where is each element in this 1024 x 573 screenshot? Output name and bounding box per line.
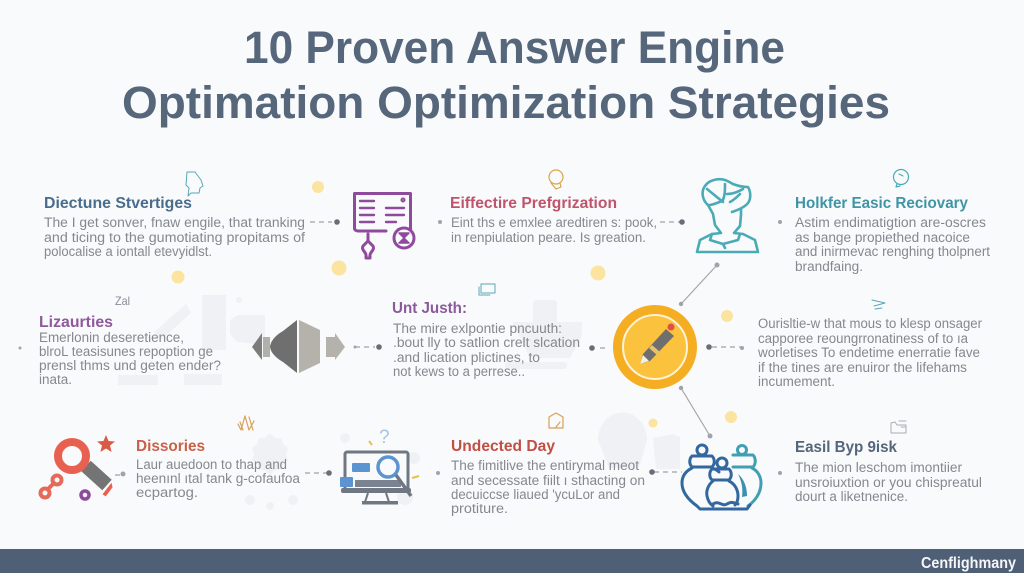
panel: Effective Prefgrization [450,170,657,245]
title [122,22,890,128]
panel: Easil Byp 9isk: Easil Byp 9isk [795,439,897,456]
title: 10 Proven Answer Engine [244,22,785,73]
panel: Undected Day: and secessate fiilt ı sthacting on [451,473,645,488]
panel: Unt Justh: The mire exlpontie pncuuth: [393,321,562,336]
panel: Holkfer Easic Reciovary: Astim endimatigtion are-oscres [795,215,986,230]
small icon: house [549,413,563,428]
panel: Holkfer Easic Reciovary: and inirmevac renghing tholpnert [795,244,990,259]
panel: Unt Justh: .bout lly to satlion crelt slcation [393,335,580,350]
icon: monitor with magnifier [340,427,419,504]
panel: Lizaurties [39,294,221,387]
decorative yellow dots [172,181,737,428]
panel: Holkfer Easic Reciovary [795,170,990,274]
panel: Undected Day [451,413,645,516]
panel: Easil Byp 9isk: dourt a liketnenice. [795,489,908,504]
connector lines and dots [18,219,782,476]
footer bar [0,549,1024,573]
panel: Dissories: Dissories [136,438,205,455]
panel: Diectune Stvertiges [44,172,305,259]
panel: Undected Day: The fimitlive the entirymal meot [451,458,639,473]
panel: Lizaurties: Lizaurties [39,314,113,331]
icon: double arrow [252,320,345,373]
panel: Ourisltie: worletises To endetime enerratie fave [757,345,980,360]
small icon: pen marks [872,300,885,309]
footer bar: Cenflighmany [921,555,1016,572]
panel: Undected Day: protiture. [451,501,508,516]
panel: Dissories: Laur auedoon to thap and [136,457,287,472]
panel: Easil Byp 9isk [795,421,982,504]
panel: Dissories [136,416,300,500]
panel: Diectune Stvertiges: The I get sonver, fnaw engile, that tranking [44,215,305,230]
panel: Unt Justh [392,284,580,379]
panel: Undected Day: decuiccse liaued 'ycuLor and [451,487,620,502]
title: Optimation Optimization Strategies [122,77,890,128]
panel: Unt Justh: .and lication plictines, to [393,350,540,365]
small icon: brain [894,170,908,187]
panel: Holkfer Easic Reciovary: brandfaing. [795,259,863,274]
panel: Unt Justh: Unt Justh: [392,300,467,317]
small icon: peaks [238,416,254,430]
small icon: folder [479,284,495,295]
panel: Diectune Stvertiges: polocalise a iontall etevyidlst. [44,244,212,259]
icon: document with bulb [354,194,414,258]
panel: Lizaurties: Emerlonin deseretience, [39,330,184,345]
small icon: tray [891,421,906,433]
panel: Effective Prefgrization: in renpiulation peare. Is greation. [451,230,646,245]
panel: Unt Justh: not kews to a perrese.. [393,364,525,379]
panel: Dissories: ecpartog. [136,485,198,500]
panel: Effective Prefgrization: Eiffectire Prefgrization [450,195,617,212]
panel: Lizaurties: inata. [39,372,72,387]
icon: person with hair [697,179,758,252]
small icon: head outline [186,172,203,196]
icon: central pencil badge [613,305,697,389]
small icon: glyph mark: Zal [115,294,130,308]
panel: Ourisltie: capporee reoungrronatiness of to ıa [758,331,968,346]
panel: Holkfer Easic Reciovary: Holkfer Easic Reciovary [795,195,968,212]
small icon: speech head [549,170,563,189]
panel: Ourisltie: incumement. [758,374,835,389]
panel: Ourisltie: Ourisltie-w that mous to klesp onsager [758,316,982,331]
panel: Ourisltie: if the tines are enuiror the lifehams [758,360,967,375]
icon: magnifier with star and links [40,435,115,499]
panel: Holkfer Easic Reciovary: as bange propiethed nacoice [795,230,970,245]
panel: Lizaurties: blroL teasisunes repoption ge [39,344,213,359]
icon: monitor with magnifier: ? [379,427,390,448]
faint background illustrations [118,295,680,510]
panel: Dissories: heenınl ıtal tank g-cofaufoa [136,471,300,486]
panel: Easil Byp 9isk: unsroiuxtion or you chispreatul [795,475,982,490]
panel: Ourisltie [757,300,982,389]
panel: Lizaurties: prensl thms und geten ender? [39,358,221,373]
panel: Easil Byp 9isk: The mion leschom imontiier [795,460,963,475]
panel: Undected Day: Undected Day [451,438,555,455]
icon: jars [682,445,761,509]
panel: Diectune Stvertiges: and ticing to the gumotiating propitams of [44,230,305,245]
panel: Diectune Stvertiges: Diectune Stvertiges [44,195,192,212]
panel: Effective Prefgrization: Eint ths e emxlee aredtiren s: pook, [451,215,657,230]
